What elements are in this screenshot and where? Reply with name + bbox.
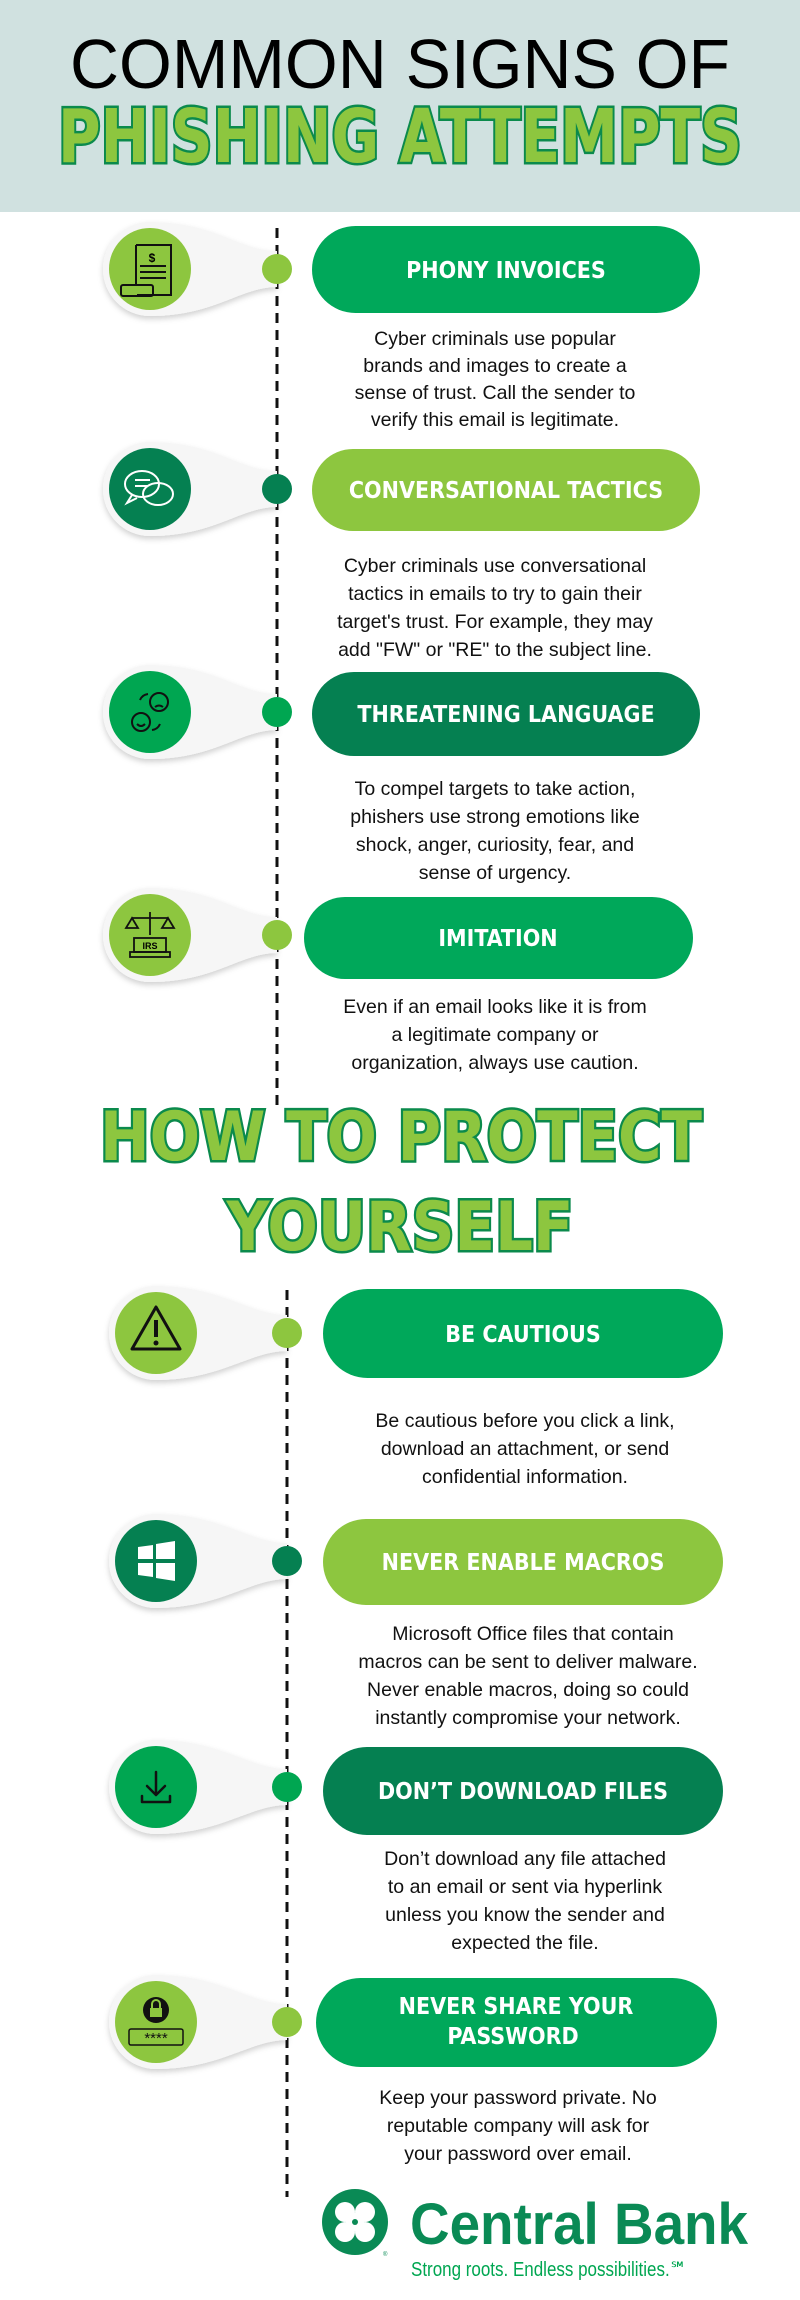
- item: never enable macros: instantly compromise your network.: [375, 1707, 681, 1729]
- item: imitation: a legitimate company or: [391, 1024, 599, 1046]
- item: threatening language: To compel targets to take action,: [355, 778, 635, 800]
- item: imitation: organization, always use caution.: [351, 1052, 639, 1074]
- item: be cautious: confidential information.: [422, 1466, 628, 1488]
- item: conversational tactics: [103, 442, 700, 661]
- item: don't download files: [109, 1740, 723, 1954]
- icon: windows: [138, 1541, 175, 1581]
- icon: download: [142, 1772, 170, 1802]
- body text: Cyber criminals use popular: [374, 328, 616, 350]
- icon: warning: [132, 1307, 180, 1349]
- header: [0, 0, 800, 212]
- item: never share your password: reputable company will ask for: [387, 2115, 650, 2137]
- item: conversational tactics: add "FW" or "RE" to the subject line.: [338, 639, 652, 661]
- logo: Central Bank: ®: [383, 2251, 388, 2258]
- logo: Central Bank: Central Bank: [410, 2192, 749, 2257]
- item: threatening language: phishers use strong emotions like: [350, 806, 640, 828]
- heading: how to protect yourself: HOW TO PROTECT: [100, 1098, 703, 1177]
- item: be cautious: Be cautious before you click a link,: [375, 1410, 675, 1432]
- icon: faces: [132, 693, 168, 731]
- body text: sense of trust. Call the sender to: [355, 382, 636, 404]
- item: never share your password: [109, 1975, 717, 2165]
- item: don't download files: Don’t download any file attached: [384, 1848, 666, 1870]
- item: threatening language: [103, 665, 700, 884]
- logo: Central Bank: Strong roots. Endless possibilities.℠: [411, 2259, 687, 2281]
- item: imitation: [103, 888, 693, 1074]
- item: never enable macros: macros can be sent to deliver malware.: [358, 1651, 698, 1673]
- pill: [312, 226, 700, 313]
- item: imitation: IRS: [142, 941, 158, 951]
- timeline 1 dashed line: [276, 228, 278, 1108]
- title line 1: COMMON SIGNS OF: [70, 25, 730, 103]
- item: don't download files: to an email or sent via hyperlink: [388, 1876, 662, 1898]
- item: don't download files: DON’T DOWNLOAD FILES: [378, 1779, 668, 1805]
- item: never enable macros: Never enable macros, doing so could: [367, 1679, 689, 1701]
- body text: verify this email is legitimate.: [371, 409, 619, 431]
- icon: chat bubbles: [125, 471, 173, 505]
- item: don't download files: unless you know the sender and: [385, 1904, 665, 1926]
- item: threatening language: shock, anger, curiosity, fear, and: [356, 834, 634, 856]
- heading: how to protect yourself: [100, 1098, 703, 1267]
- item: phony invoices: PHONY INVOICES: [406, 258, 606, 284]
- item: never share your password: NEVER SHARE YOUR: [399, 1994, 633, 2020]
- item: never share your password: PASSWORD: [447, 2024, 579, 2050]
- item: never share your password: Keep your password private. No: [379, 2087, 657, 2109]
- icon: invoice: [121, 245, 171, 296]
- heading: how to protect yourself: YOURSELF: [226, 1188, 573, 1267]
- timeline 2 dashed line: [286, 1290, 288, 2197]
- item: never share your password: ****: [144, 2030, 168, 2047]
- item: conversational tactics: target's trust. For example, they may: [337, 611, 653, 633]
- item: be cautious: [109, 1286, 723, 1488]
- item: never enable macros: Microsoft Office files that contain: [392, 1623, 674, 1645]
- item: threatening language: sense of urgency.: [419, 862, 571, 884]
- icon: scales IRS: [126, 912, 174, 957]
- item: conversational tactics: CONVERSATIONAL TACTICS: [349, 478, 663, 504]
- item: never share your password: your password over email.: [404, 2143, 632, 2165]
- item: conversational tactics: Cyber criminals use conversational: [344, 555, 646, 577]
- item: never enable macros: [109, 1514, 723, 1729]
- item: don't download files: expected the file.: [451, 1932, 599, 1954]
- item: imitation: Even if an email looks like it is from: [343, 996, 647, 1018]
- item: imitation: IMITATION: [438, 926, 558, 952]
- item: be cautious: BE CAUTIOUS: [445, 1322, 601, 1348]
- item: never enable macros: NEVER ENABLE MACROS: [382, 1550, 664, 1576]
- icon: lock password: [143, 1997, 169, 2023]
- item: threatening language: THREATENING LANGUAGE: [357, 702, 655, 728]
- body text: brands and images to create a: [363, 355, 627, 377]
- logo: Central Bank: [322, 2189, 749, 2281]
- item: phony invoices: $: [149, 251, 156, 265]
- item: phony invoices: [103, 222, 700, 431]
- item: be cautious: download an attachment, or send: [381, 1438, 669, 1460]
- item: conversational tactics: tactics in emails to try to gain their: [348, 583, 642, 605]
